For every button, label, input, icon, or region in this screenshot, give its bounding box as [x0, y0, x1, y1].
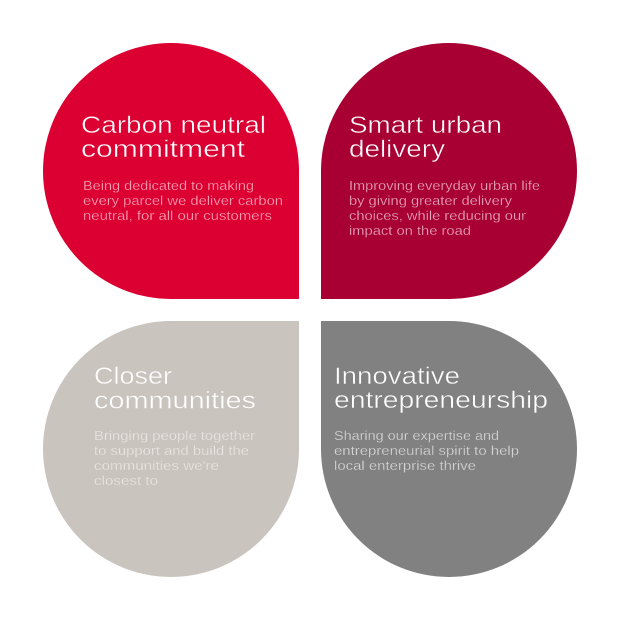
heading: closer communities: communities [94, 388, 256, 414]
text: carbon neutral description: every parcel we deliver carbon [83, 193, 283, 208]
panel: innovative entrepreneurship [321, 321, 577, 577]
heading: closer communities: Closer [94, 363, 172, 390]
heading: carbon neutral commitment [81, 112, 266, 163]
heading: carbon neutral commitment: commitment [81, 136, 245, 163]
text: smart urban description: Improving everyday urban life [349, 178, 540, 193]
heading: smart urban delivery: Smart urban [349, 112, 502, 139]
text: carbon neutral description: Being dedicated to making [83, 178, 254, 193]
text: smart urban description [349, 178, 540, 238]
heading: innovative entrepreneurship: Innovative [334, 363, 460, 390]
text: innovative entrepreneurship description: entrepreneurial spirit to help [334, 443, 519, 458]
heading: smart urban delivery: delivery [349, 136, 445, 163]
panel: carbon neutral commitment [43, 43, 299, 299]
text: carbon neutral description: neutral, for all our customers [83, 208, 273, 223]
text: smart urban description: impact on the road [349, 223, 471, 238]
heading: carbon neutral commitment: Carbon neutral [81, 112, 266, 139]
text: closer communities description: communities we're [94, 458, 219, 473]
text: closer communities description [94, 428, 256, 488]
heading: smart urban delivery [349, 112, 502, 163]
text: carbon neutral description [83, 178, 283, 223]
text: closer communities description: to support and build the [94, 443, 249, 458]
text: innovative entrepreneurship description: local enterprise thrive [334, 458, 476, 473]
panel: smart urban delivery [321, 43, 577, 299]
heading: innovative entrepreneurship: entrepreneurship [334, 387, 548, 414]
text: closer communities description: Bringing people together [94, 428, 256, 443]
heading: closer communities [94, 363, 256, 414]
text: closer communities description: closest to [94, 473, 158, 488]
text: innovative entrepreneurship description: Sharing our expertise and [334, 428, 499, 443]
text: smart urban description: by giving greater delivery [349, 193, 513, 208]
text: innovative entrepreneurship description [334, 428, 519, 473]
text: smart urban description: choices, while reducing our [349, 208, 527, 223]
panel: closer communities [43, 321, 299, 577]
heading: innovative entrepreneurship [334, 363, 548, 414]
